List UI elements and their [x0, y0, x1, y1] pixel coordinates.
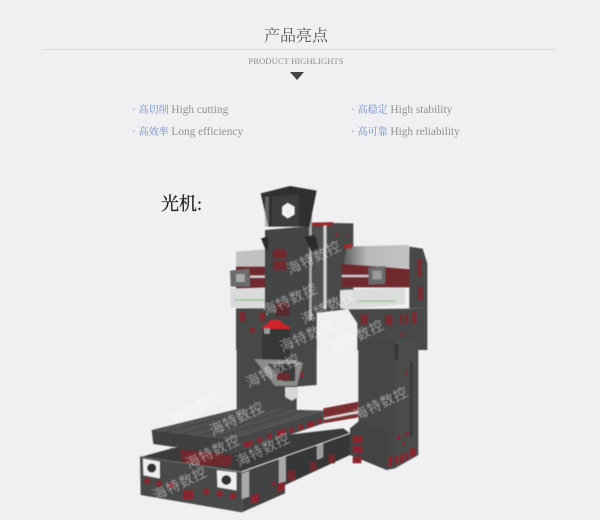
feature: long efficiency: · 高效率 Long efficiency	[132, 126, 243, 138]
watermark 1: 海特数控	[284, 238, 344, 277]
watermark 2: 海特数控	[260, 280, 320, 319]
bed far section	[285, 433, 350, 485]
watermark 10: 海特数控	[183, 432, 243, 471]
watermark 5: 海特数控	[327, 317, 387, 356]
icon: down triangle	[290, 72, 304, 80]
watermark 11: 海特数控	[233, 430, 293, 469]
title: 产品亮点	[264, 28, 328, 45]
machine label: 光机:	[161, 194, 202, 214]
lower column	[237, 340, 317, 410]
divider line	[42, 49, 556, 50]
vertical column	[261, 197, 353, 350]
machine lower: bed and table	[140, 340, 418, 512]
top housing with hexagon opening	[261, 186, 317, 227]
bed interior	[140, 428, 350, 472]
subtitle: PRODUCT HIGHLIGHTS	[248, 56, 344, 66]
watermark 7: 海特数控	[351, 384, 411, 423]
watermark 9: 海特数控	[207, 399, 267, 438]
linear rails	[323, 402, 358, 423]
left gantry beam	[230, 249, 267, 350]
work table	[152, 408, 323, 455]
machine upper: gantry and column	[230, 186, 427, 350]
feature: high reliability: · 高可靠 High reliability	[351, 126, 460, 138]
right gantry beam	[312, 222, 427, 350]
bed front	[140, 433, 350, 512]
spindle head	[254, 302, 303, 401]
feature: high stability: · 高稳定 High stability	[351, 104, 452, 116]
watermark 12: 海特数控	[150, 464, 210, 503]
watermark 3: 海特数控	[298, 286, 357, 327]
watermarks	[150, 238, 411, 503]
watermark 6: 海特数控	[243, 351, 303, 390]
right column and foot	[350, 340, 418, 470]
feature: high cutting: · 高切削 High cutting	[132, 104, 228, 116]
watermark 4: 海特数控	[277, 316, 337, 355]
watermark 8: 海特数控	[167, 388, 227, 427]
